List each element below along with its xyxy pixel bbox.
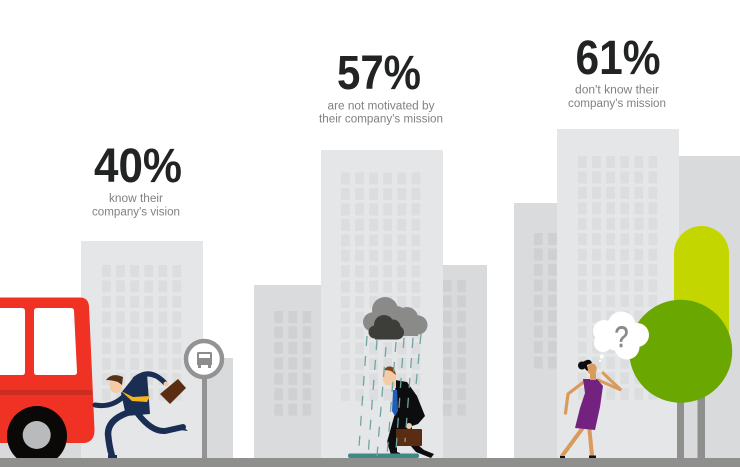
stat: 61% don't know their company's mission: 61% <box>576 32 660 85</box>
tree: tall yellow-green <box>674 226 729 458</box>
sad businessman <box>382 366 434 458</box>
stat: 61% don't know their company's mission: don't know their <box>575 84 659 96</box>
tree: round green <box>629 300 732 458</box>
thought bubble with question mark <box>593 312 649 362</box>
building group: right scene <box>514 129 740 458</box>
stat: 40% know their company's vision: 40% <box>94 140 182 193</box>
rain <box>359 334 421 456</box>
stat: 40% know their company's vision: know their <box>109 193 163 205</box>
woman in purple dress <box>560 360 621 458</box>
stat: 57% are not motivated by their company's mission: 57% <box>337 47 421 100</box>
stat: 61% don't know their company's mission: company's mission <box>568 98 666 110</box>
stat: 40% know their company's vision <box>92 140 182 218</box>
stat: 57% are not motivated by their company's mission: are not motivated by <box>328 100 435 112</box>
bus stop sign <box>186 341 222 458</box>
stat: 61% don't know their company's mission <box>568 32 666 110</box>
stat: 40% know their company's vision: company's vision <box>92 206 180 218</box>
rain cloud <box>363 297 428 340</box>
building group: left scene <box>0 241 233 458</box>
building group: middle scene <box>254 150 487 458</box>
stat: 57% are not motivated by their company's mission <box>319 47 443 126</box>
puddle <box>348 454 419 458</box>
thought bubble with question mark: ? <box>614 321 628 354</box>
stat: 57% are not motivated by their company's mission: their company's mission <box>319 114 443 126</box>
bus <box>0 298 94 458</box>
ground <box>0 458 740 467</box>
running businessman <box>95 374 188 458</box>
